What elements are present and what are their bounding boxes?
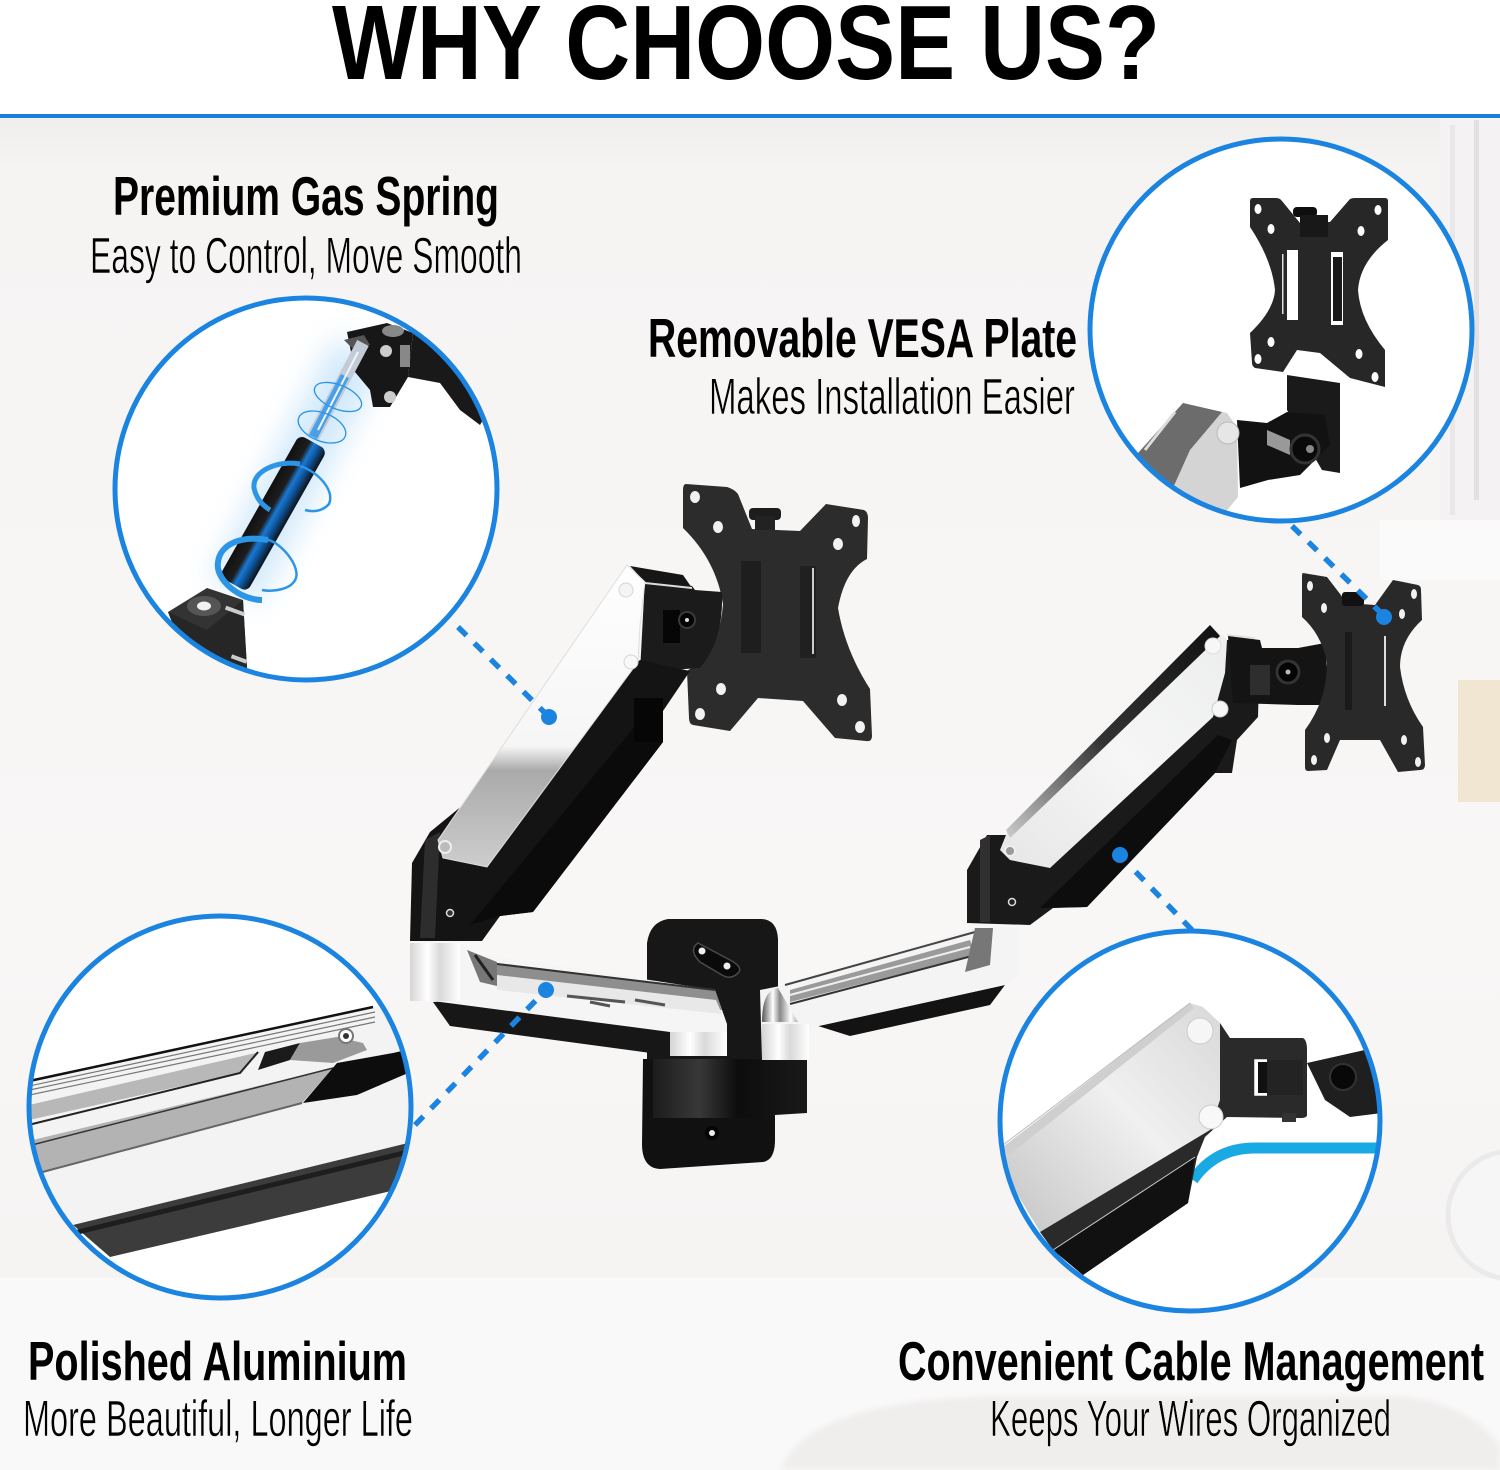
header band <box>0 0 1500 118</box>
rod <box>313 343 363 437</box>
VESA plate left <box>683 484 872 741</box>
chrome panel <box>1138 403 1238 510</box>
chrome surface <box>20 1007 415 1225</box>
black forearm right <box>967 640 1260 925</box>
connector: aluminium callout to arm <box>415 982 554 1125</box>
polished lower arm left <box>410 943 727 1056</box>
icon: blue rings <box>218 377 366 600</box>
label: Premium Gas Spring: Premium Gas Spring <box>113 165 499 227</box>
connector: VESA callout to plate <box>1292 526 1392 625</box>
detached plate <box>1250 198 1388 387</box>
wall plate <box>642 919 807 1169</box>
callout circle: gas spring <box>115 298 500 680</box>
connector: cable callout to arm <box>1112 847 1192 930</box>
cable <box>1193 1148 1385 1180</box>
tilt bracket left <box>630 566 722 672</box>
right lower chrome arm <box>760 927 1018 1060</box>
callout circle: VESA plate <box>1090 139 1472 530</box>
black arm <box>1040 1023 1307 1275</box>
chrome upper panel right <box>1000 625 1227 868</box>
chrome upper panel <box>438 565 645 867</box>
chrome panel <box>1003 1003 1220 1232</box>
bracket <box>1287 375 1340 473</box>
label: Polished Aluminium: Polished Aluminium <box>28 1330 407 1392</box>
tilt bracket right <box>1227 635 1330 705</box>
icon: glow around spring <box>235 350 360 590</box>
left monitor arm <box>410 484 872 1056</box>
label: Removable VESA Plate: Removable VESA Plate <box>648 307 1077 369</box>
VESA plate right <box>1302 573 1425 772</box>
label: Polished Aluminium: More Beautiful, Longer Life <box>23 1390 413 1447</box>
black forearm <box>410 660 690 941</box>
label: Premium Gas Spring <box>90 165 522 284</box>
label: Removable VESA Plate: Makes Installation Easier <box>709 368 1075 425</box>
label: Removable VESA Plate <box>648 307 1077 425</box>
callout circle: polished aluminium <box>20 916 415 1298</box>
connector: gas spring to arm <box>458 627 557 725</box>
cylinder <box>219 434 327 592</box>
label: Premium Gas Spring: Easy to Control, Move Smooth <box>90 227 522 284</box>
label: Polished Aluminium <box>23 1330 413 1447</box>
lower arm dark underside left <box>433 1000 675 1056</box>
label: Convenient Cable Management <box>898 1330 1484 1447</box>
top bracket <box>408 334 482 425</box>
right monitor arm <box>760 573 1425 1060</box>
dark underside <box>73 1143 408 1257</box>
callout circle: cable management <box>1000 931 1390 1311</box>
bottom bracket <box>168 588 247 668</box>
